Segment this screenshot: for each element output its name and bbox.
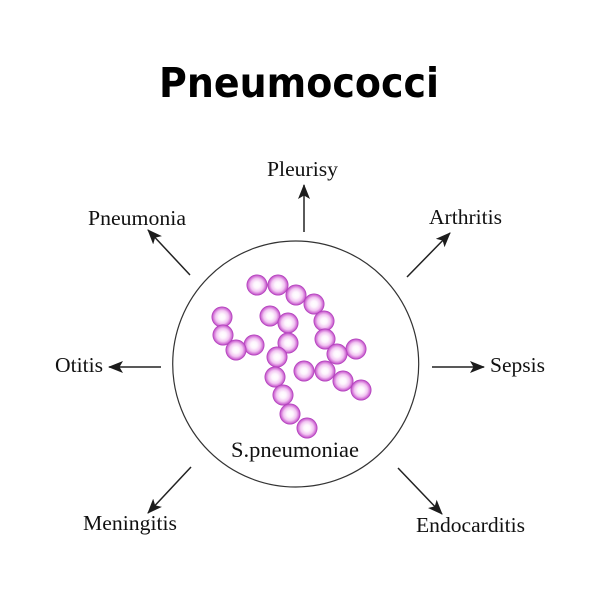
arrow: meningitis bbox=[148, 467, 191, 513]
bacteria label: S.pneumoniae bbox=[231, 437, 359, 462]
label: endocarditis: Endocarditis bbox=[416, 513, 525, 537]
label: pneumonia: Pneumonia bbox=[88, 206, 186, 230]
chain: left bbox=[212, 306, 264, 360]
label: arthritis: Arthritis bbox=[429, 205, 502, 229]
arrow: pneumonia bbox=[148, 230, 190, 275]
bacteria chains bbox=[212, 274, 372, 438]
arrow: endocarditis bbox=[398, 468, 442, 514]
label: otitis: Otitis bbox=[55, 353, 103, 377]
arrow: sepsis bbox=[432, 366, 484, 368]
arrow: arthritis bbox=[407, 233, 450, 277]
arrow: otitis bbox=[109, 366, 161, 368]
central circle bbox=[173, 241, 419, 487]
label: meningitis: Meningitis bbox=[83, 511, 177, 535]
title: Pneumococci bbox=[159, 59, 439, 107]
arrow: pleurisy bbox=[303, 185, 305, 232]
chain: middle bbox=[260, 306, 318, 438]
chain: long upper bbox=[246, 274, 372, 400]
label: pleurisy: Pleurisy bbox=[267, 157, 338, 181]
label: sepsis: Sepsis bbox=[490, 353, 545, 377]
